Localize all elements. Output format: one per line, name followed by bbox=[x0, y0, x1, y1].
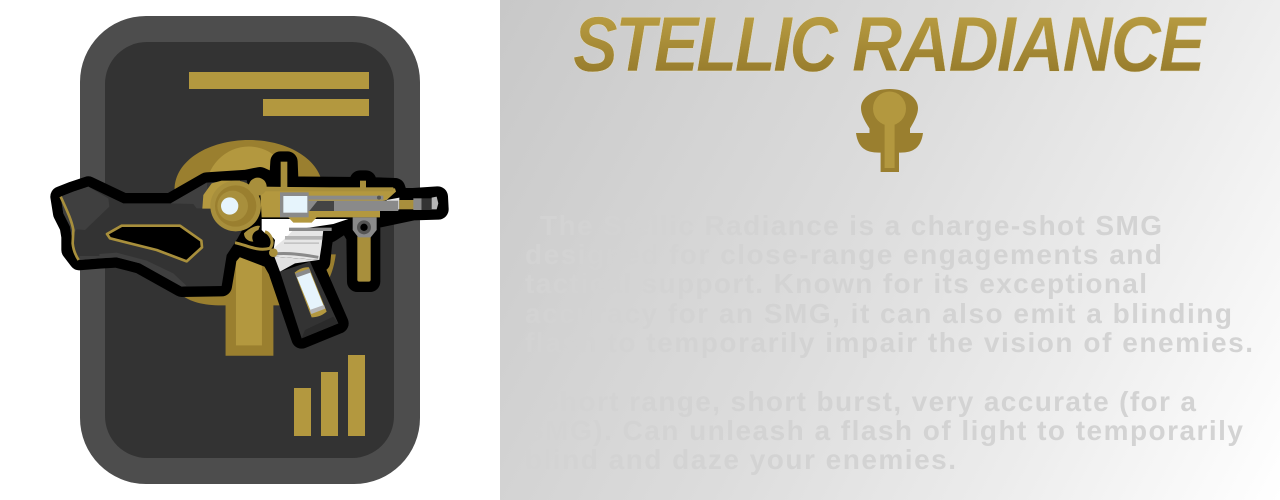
foregrip bbox=[353, 217, 377, 282]
icon: small class emblem bbox=[856, 89, 923, 172]
stock bbox=[61, 180, 253, 287]
text block: weapon description bbox=[525, 210, 1253, 358]
receiver lower bbox=[262, 219, 348, 272]
receiver disc with lens bbox=[202, 178, 267, 231]
weapon: SMG illustration bbox=[61, 162, 438, 338]
title: STELLIC bbox=[573, 1, 839, 88]
sight housing and slide bbox=[280, 192, 398, 217]
barrel bbox=[387, 197, 438, 211]
text block: weapon summary: Short range, short burst, very accurate (for a bbox=[540, 386, 1196, 417]
rarity bars top bbox=[189, 72, 369, 116]
text block: weapon summary: blind and daze your enemies. bbox=[525, 444, 956, 475]
trigger guard bbox=[235, 226, 278, 257]
stat bars bottom bbox=[294, 355, 365, 436]
title bbox=[573, 0, 1208, 88]
text block: weapon description: The Stellic Radiance is a charge-shot SMG bbox=[540, 210, 1162, 241]
upper receiver bbox=[260, 162, 396, 223]
panel: description background bbox=[500, 0, 1280, 500]
text block: weapon description: designed for close-range engagements and bbox=[525, 239, 1162, 270]
magazine bbox=[280, 262, 338, 338]
text block: weapon description: flash to temporarily impair the vision of enemies. bbox=[525, 327, 1253, 358]
text block: weapon summary: SMG). Can unleash a flash of light to temporarily bbox=[525, 415, 1243, 446]
icon: large class emblem bbox=[162, 140, 336, 356]
stock cutout bbox=[107, 226, 202, 261]
text block: weapon summary bbox=[525, 386, 1243, 475]
card: weapon badge bbox=[61, 16, 438, 484]
gun black outline bbox=[61, 162, 438, 338]
text block: weapon description: accuracy for an SMG, it can also emit a blinding bbox=[525, 298, 1232, 329]
title: RADIANCE bbox=[852, 0, 1208, 88]
text block: weapon description: tactical support. Known for its exceptional bbox=[525, 268, 1147, 299]
